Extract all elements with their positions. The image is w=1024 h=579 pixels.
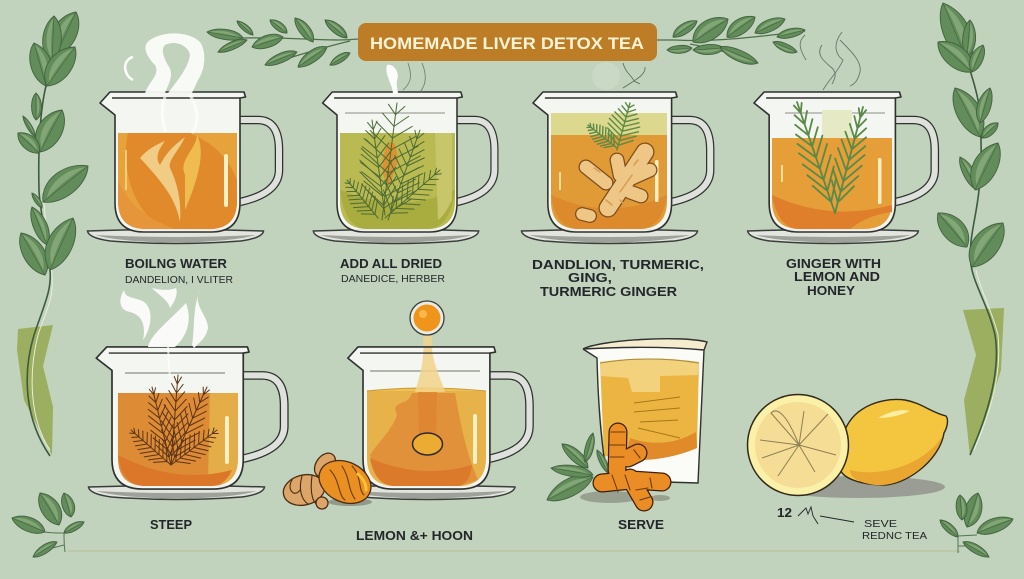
label: step 4: GINGER WITH [786, 257, 881, 271]
label: serve tea: SEVE [864, 518, 897, 530]
turmeric root and leaves by glass [543, 432, 670, 507]
bottom left sprig [9, 488, 86, 560]
label: step 4: LEMON AND [794, 270, 880, 284]
herb [123, 374, 225, 475]
left vine [13, 6, 95, 456]
cup 2: add dried herbs [313, 63, 494, 244]
cup 4: ginger with lemon and honey [748, 32, 935, 244]
label: step 3: TURMERIC GINGER [540, 285, 677, 299]
label: steep: STEEP [150, 518, 192, 532]
steam [592, 62, 645, 90]
title banner [358, 23, 657, 61]
label: step 4 [786, 257, 881, 298]
label: step 2: ADD ALL DRIED [340, 257, 442, 271]
honey drop [412, 433, 442, 455]
label: serve tea [862, 518, 927, 542]
label: lemon and honey: LEMON &+ HOON [356, 529, 473, 543]
label: step 1: DANDELION, I VLITER [125, 274, 233, 286]
label: serve: SERVE [618, 518, 664, 532]
label: step 3: GING, [568, 271, 612, 285]
lemon [748, 394, 947, 498]
whole lemon [840, 399, 947, 485]
lemon half [748, 394, 848, 496]
note: 12 with arrow: 12 [777, 506, 792, 520]
herb sprig [582, 99, 645, 155]
cup 1: boiling water [88, 33, 279, 244]
steam [120, 288, 208, 380]
label: step 2 [340, 257, 445, 285]
label: step 3: DANDLION, TURMERIC, [532, 258, 704, 272]
label: step 3 [532, 258, 704, 299]
honey stream [415, 336, 445, 392]
title: HOMEMADE LIVER DETOX TEA [370, 34, 644, 53]
note: 12 with arrow [777, 506, 854, 524]
label: step 1 [125, 257, 233, 286]
right vine [930, 0, 1013, 456]
top left branch [206, 14, 358, 71]
label: serve tea: REDNC TEA [862, 530, 927, 542]
herb sprigs [783, 97, 876, 218]
steam [800, 32, 860, 90]
turmeric roots by cup 6 [280, 449, 378, 512]
ginger root [582, 152, 650, 216]
cup 5: steep [88, 288, 284, 500]
baseline rule [68, 550, 960, 552]
label: step 4: HONEY [807, 284, 856, 298]
spoon [410, 301, 444, 335]
steam [386, 63, 425, 94]
herb sprigs [337, 99, 449, 228]
cup 6: lemon and honey [339, 301, 529, 500]
cup 7: glass of tea [583, 339, 707, 483]
steam [125, 33, 204, 133]
bottom right sprig [937, 491, 1016, 560]
cup 3: ginger [522, 62, 710, 244]
label: step 2: DANEDICE, HERBER [341, 273, 445, 285]
label: step 1: BOILNG WATER [125, 257, 227, 271]
top right branch [657, 10, 806, 69]
